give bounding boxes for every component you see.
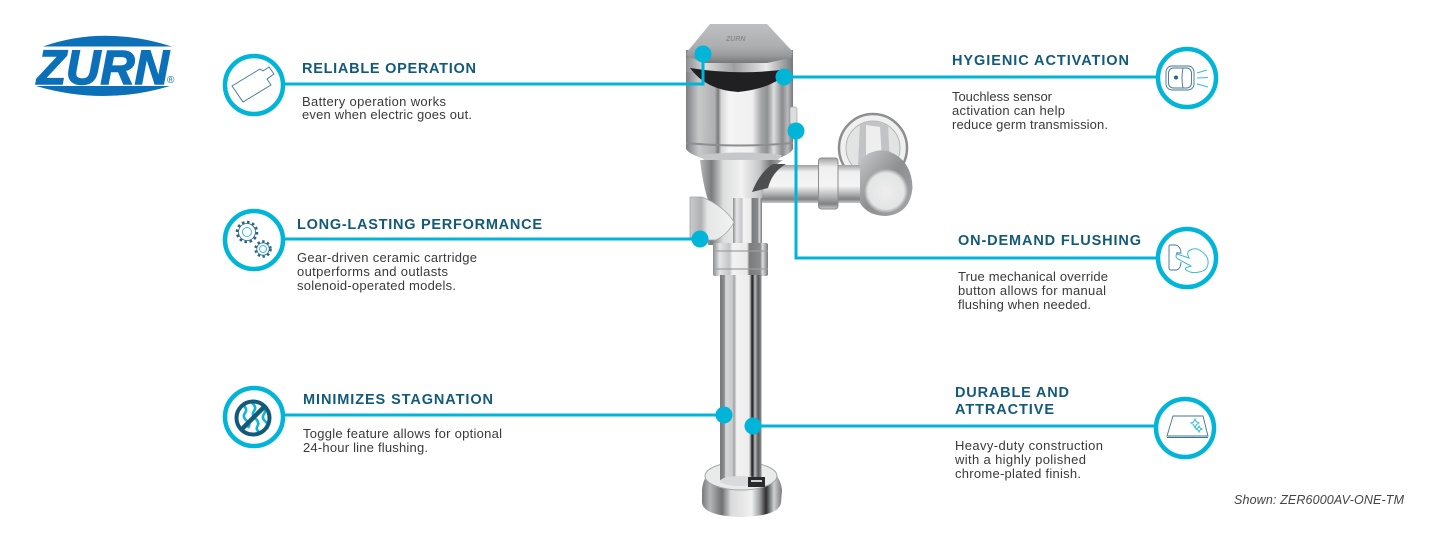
callout dot — [694, 46, 712, 62]
leader line — [784, 76, 1158, 78]
description — [297, 250, 477, 293]
logo: Zurn: ZURN — [35, 42, 170, 95]
description: Heavy-duty construction — [955, 438, 1103, 453]
top plate — [687, 24, 793, 63]
description: outperforms and outlasts — [297, 264, 448, 279]
heading: ATTRACTIVE — [955, 402, 1054, 418]
icon: finger pressing button — [1158, 229, 1216, 287]
description — [952, 89, 1108, 132]
description: Toggle feature allows for optional — [303, 426, 502, 441]
description: flushing when needed. — [958, 297, 1091, 312]
callout dot — [692, 230, 708, 248]
coupling nut — [713, 243, 768, 276]
description: Touchless sensor — [952, 89, 1053, 104]
callout dot — [716, 406, 732, 424]
description: 24-hour line flushing. — [303, 440, 428, 455]
icon: polished surface — [1156, 399, 1214, 457]
description: with a highly polished — [954, 452, 1086, 467]
leader line — [284, 54, 703, 84]
description — [303, 426, 502, 455]
description — [302, 94, 472, 122]
heading — [955, 385, 1069, 418]
description — [954, 438, 1103, 481]
floor flange — [702, 458, 782, 517]
leader line — [284, 414, 724, 416]
icon: battery — [225, 56, 283, 114]
callout: durable and attractive — [744, 385, 1214, 481]
collar — [818, 158, 838, 209]
heading: LONG-LASTING PERFORMANCE — [297, 217, 542, 233]
icon: touchless sensor — [1158, 49, 1216, 107]
callout: long-lasting performance — [225, 211, 708, 293]
description: Gear-driven ceramic cartridge — [297, 250, 477, 265]
model caption: Shown: ZER6000AV-ONE-TM — [1234, 493, 1405, 507]
heading: MINIMIZES STAGNATION — [303, 392, 493, 408]
description: solenoid-operated models. — [297, 278, 456, 293]
heading: ON-DEMAND FLUSHING — [958, 233, 1141, 249]
horizontal arm — [762, 165, 862, 203]
callout dot — [776, 68, 792, 86]
vertical tube — [720, 275, 762, 472]
leader line — [284, 238, 700, 240]
description: True mechanical override — [958, 269, 1108, 284]
heading: HYGIENIC ACTIVATION — [952, 53, 1129, 69]
icon: gears — [225, 211, 283, 269]
sensor window — [690, 68, 788, 92]
side port — [690, 197, 734, 240]
mini logo: ZURN — [725, 36, 746, 43]
description: reduce germ transmission. — [952, 117, 1108, 132]
icon: no stagnant water — [225, 388, 283, 446]
description: activation can help — [952, 103, 1065, 118]
logo: Zurn: ® — [167, 75, 175, 86]
description: Battery operation works — [302, 94, 446, 109]
flush valve product image — [686, 24, 912, 517]
callout dot — [788, 122, 804, 140]
sensor head — [686, 24, 797, 160]
heading: DURABLE AND — [955, 385, 1069, 401]
leader line — [753, 424, 1156, 428]
wall flange — [839, 114, 907, 182]
override button — [790, 107, 797, 124]
lower body — [700, 160, 786, 245]
leader line — [796, 131, 1158, 258]
callout: hygienic activation — [776, 49, 1216, 132]
description: button allows for manual — [958, 283, 1106, 298]
callout: minimizes stagnation — [225, 388, 732, 455]
elbow and button — [860, 150, 912, 216]
callout: on-demand flushing — [788, 122, 1216, 312]
callout dot — [744, 418, 762, 434]
callout: reliable operation — [225, 46, 712, 122]
description: even when electric goes out. — [302, 107, 472, 122]
heading: RELIABLE OPERATION — [302, 61, 476, 77]
description — [958, 269, 1108, 312]
description: chrome-plated finish. — [955, 466, 1081, 481]
